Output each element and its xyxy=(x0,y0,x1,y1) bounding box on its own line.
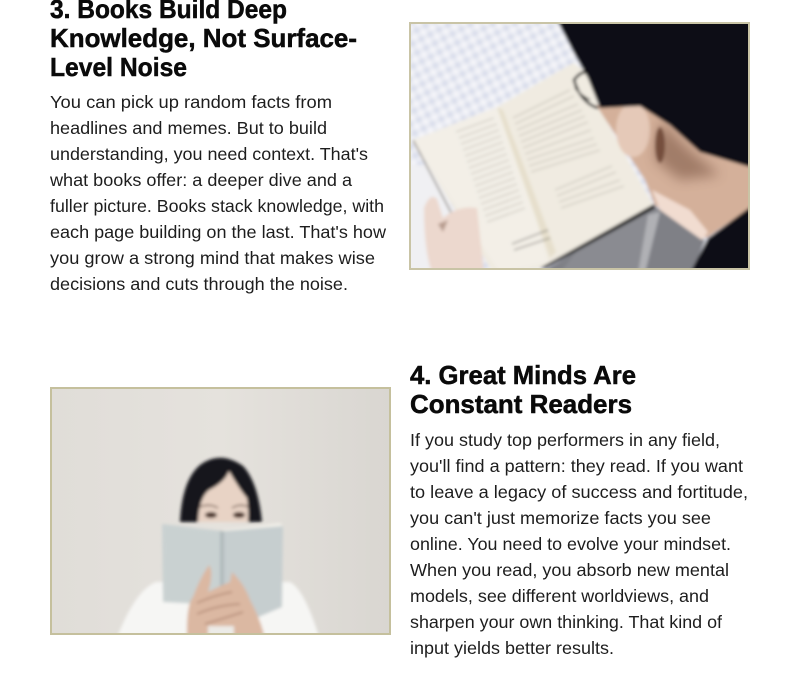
neck and face xyxy=(596,103,753,238)
face xyxy=(198,471,248,522)
printed text lines xyxy=(456,90,624,222)
heading: section 4: 4. Great Minds Are xyxy=(410,360,636,390)
glasses xyxy=(574,72,598,108)
text block: section 3 body: each page building on the last. That's how xyxy=(50,222,386,242)
book xyxy=(243,522,281,529)
photo: woman peeking over a book xyxy=(50,387,391,640)
grey table xyxy=(540,205,705,273)
heading: section 4: Constant Readers xyxy=(410,389,632,419)
text block: section 4 body: When you read, you absorb new mental xyxy=(410,560,729,580)
text block: section 4 body: you can't just memorize facts you see xyxy=(410,508,711,528)
text block: section 3 body: fuller picture. Books stack knowledge, with xyxy=(50,196,384,216)
text block: section 3 body: what books offer: a deeper dive and a xyxy=(49,170,352,190)
heading: section 3: Level Noise xyxy=(50,52,187,82)
heading: section 3: Knowledge, Not Surface- xyxy=(50,23,357,53)
text block: section 4 body: models, see different worldviews, and xyxy=(410,586,709,606)
text block: section 4 body: you'll find a pattern: they read. If you want xyxy=(410,456,743,476)
text block: section 4 body: If you study top performers in any field, xyxy=(410,430,720,450)
shirt xyxy=(118,581,318,633)
heading: section 3 xyxy=(50,0,357,82)
text block: section 4 body xyxy=(410,430,748,658)
hair xyxy=(180,458,262,522)
photo: man reading an open book xyxy=(405,18,754,273)
book pages xyxy=(442,64,653,268)
text block: section 4 body: online. You need to evolve your mindset. xyxy=(410,534,731,554)
text block: section 3 body: you grow a strong mind that makes wise xyxy=(50,248,375,268)
text block: section 3 body: You can pick up random facts from xyxy=(50,92,332,112)
heading: section 4 xyxy=(410,360,636,419)
eyes xyxy=(205,512,217,518)
text block: section 3 body: headlines and memes. But to build xyxy=(50,118,327,138)
text block: section 3 body: understanding, you need context. That's xyxy=(50,144,368,164)
hands xyxy=(187,565,265,640)
text block: section 4 body: to leave a legacy of success and fortitude, xyxy=(410,482,748,502)
text block: section 3 body: decisions and cuts through the noise. xyxy=(50,274,348,294)
hand xyxy=(424,197,484,273)
shirt xyxy=(690,206,748,268)
hair xyxy=(556,18,753,168)
text block: section 4 body: input yields better results. xyxy=(410,638,614,658)
text block: section 4 body: sharpen your own thinking. That kind of xyxy=(410,612,722,632)
text block: section 3 body xyxy=(49,92,386,294)
